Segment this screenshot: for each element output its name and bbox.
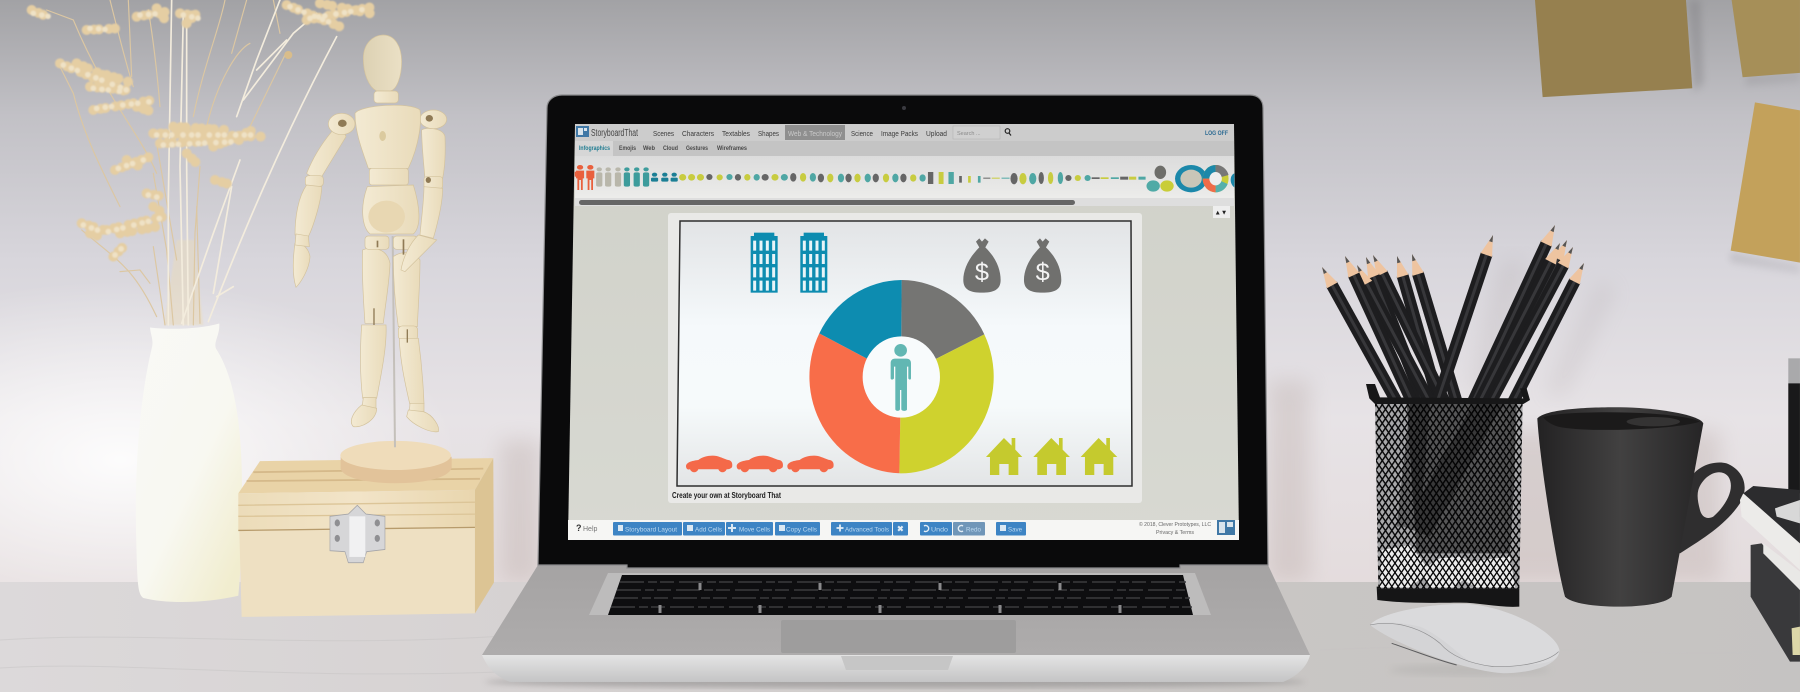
support rod — [393, 236, 395, 447]
dried flowers — [32, 0, 373, 325]
button: redo: Redo — [966, 526, 981, 534]
nav labels: Characters — [682, 129, 714, 138]
button: advanced tools — [831, 522, 892, 536]
nav labels: Shapes — [758, 129, 779, 138]
three circles chart icon — [1146, 166, 1174, 192]
mesh cup — [1366, 384, 1530, 607]
building one — [751, 233, 778, 293]
houses — [986, 438, 1117, 475]
copyright: Privacy & Terms — [1156, 530, 1194, 536]
touchpad — [781, 620, 1016, 653]
donut hole — [863, 336, 940, 418]
pencil holder and pencils — [1317, 222, 1615, 607]
pencil shadow — [1470, 260, 1615, 395]
box top — [238, 458, 493, 493]
silver latch — [330, 505, 385, 563]
mannequin stand — [340, 441, 452, 483]
mouse shadow — [1390, 664, 1550, 676]
notebooks and spool — [1740, 358, 1800, 662]
nav highlight — [785, 125, 845, 140]
logo — [576, 126, 589, 137]
sticky notes — [1535, 0, 1800, 271]
nav labels: Web & Technology — [788, 129, 842, 138]
mouse underside line — [1392, 643, 1457, 665]
money bag two — [1024, 238, 1061, 293]
category tabs: Wireframes — [717, 145, 747, 152]
button: undo: Undo — [931, 526, 948, 534]
mug handle — [1670, 462, 1745, 553]
category tabs — [579, 145, 747, 152]
help link: Help — [583, 526, 598, 533]
button: copy cells: Copy Cells — [786, 526, 818, 534]
nav labels: Upload — [926, 129, 947, 138]
clip on book — [1775, 500, 1800, 523]
grey people — [596, 167, 621, 187]
button: save — [996, 522, 1026, 536]
mannequin body — [293, 35, 447, 432]
laptop lid bezel — [538, 95, 1268, 568]
donut chart icon — [1203, 165, 1229, 192]
storyboard card — [668, 213, 1142, 503]
button: storyboard layout — [613, 522, 682, 536]
neck — [374, 91, 398, 103]
wall shadow behind laptop and mug — [500, 380, 1720, 582]
donut chart — [809, 280, 994, 473]
sticky note one — [1535, 0, 1692, 97]
mannequin details — [338, 115, 433, 343]
box lid seam — [238, 527, 475, 530]
storyboard cell — [677, 221, 1132, 486]
category tabs: Web — [643, 145, 655, 152]
nav labels: Textables — [722, 129, 750, 138]
cup base — [1377, 587, 1519, 607]
library icons — [575, 165, 1234, 192]
pale stems — [168, 0, 337, 325]
top navigation bar — [575, 124, 1234, 156]
black mug — [1537, 407, 1745, 607]
partial icon at strip edge — [1231, 173, 1234, 187]
ring chart icon — [1175, 165, 1207, 192]
box top grain — [247, 469, 483, 481]
sticky note shadows — [1688, 0, 1800, 271]
lower book pages — [1763, 543, 1800, 590]
flower bud — [284, 51, 292, 59]
teal people — [624, 167, 649, 187]
book spine label — [1792, 627, 1800, 655]
help link: ? — [576, 523, 582, 533]
car two — [737, 456, 783, 472]
search box — [953, 126, 1000, 139]
canvas arrows: ▲▼ — [1214, 210, 1227, 216]
icon library strip — [575, 156, 1234, 206]
mug body — [1537, 407, 1703, 607]
brand name: StoryboardThat — [591, 128, 638, 139]
car one — [686, 456, 732, 472]
mesh wall — [1375, 403, 1523, 588]
pelvis — [363, 185, 419, 234]
button: undo — [920, 522, 952, 536]
help link — [576, 523, 598, 533]
lower book — [1751, 543, 1800, 662]
building two — [800, 233, 827, 293]
front notch — [841, 656, 953, 670]
yellow small icons — [679, 172, 1136, 184]
wooden box — [238, 441, 494, 617]
soft light on wall — [0, 280, 460, 640]
nav labels — [653, 129, 947, 138]
camera — [902, 106, 906, 110]
cell infographic — [686, 233, 1117, 475]
button: close: ✖ — [897, 524, 904, 534]
button: save: Save — [1008, 526, 1022, 534]
bright reflections in mesh — [1380, 545, 1515, 587]
laptop base shadow — [485, 676, 1305, 688]
spool — [1788, 358, 1800, 493]
mouse shell — [1370, 604, 1559, 673]
category tabs: Gestures — [686, 145, 708, 152]
copyright — [1139, 521, 1211, 536]
flower clusters — [32, 3, 373, 257]
magic mouse — [1370, 604, 1559, 676]
nav labels: Science — [851, 129, 873, 138]
mug inner highlight — [1627, 417, 1680, 426]
search icon — [1005, 129, 1011, 136]
search box: Search ... — [957, 131, 981, 137]
log off: LOG OFF — [1205, 130, 1228, 137]
tan stems — [47, 0, 285, 325]
category tabs: Cloud — [663, 145, 678, 152]
pencils seen through mesh — [1397, 403, 1503, 537]
orange people — [575, 165, 594, 190]
button: add cells: Add Cells — [695, 526, 723, 534]
mouse seam — [1370, 623, 1559, 667]
person icon — [891, 344, 911, 411]
footer logo — [1217, 520, 1235, 535]
wooden mannequin — [293, 35, 447, 447]
keyboard well — [589, 573, 1211, 615]
upper book pages — [1740, 493, 1800, 570]
vase — [136, 323, 242, 602]
car three — [787, 456, 834, 472]
copyright: © 2018, Clever Prototypes, LLC — [1139, 521, 1211, 528]
house two — [1033, 438, 1070, 475]
canvas arrows — [1213, 206, 1230, 218]
caption: Create your own at Storyboard That — [672, 490, 781, 500]
library scrollbar — [575, 198, 1234, 206]
box lid front — [238, 490, 475, 530]
sticky note two — [1732, 0, 1800, 77]
screen — [568, 124, 1239, 540]
dark mesh shading — [1407, 403, 1517, 553]
teal small icons — [726, 172, 1146, 184]
desk surface — [0, 582, 1800, 692]
active tab — [575, 141, 613, 156]
button: move cells: Move Cells — [739, 526, 771, 534]
segment: grey — [901, 280, 984, 377]
money bag two: $ — [1036, 259, 1050, 287]
building icons — [751, 233, 827, 293]
grey small icons — [706, 172, 1128, 184]
mug inside — [1543, 412, 1700, 430]
button: copy cells — [775, 522, 820, 536]
segment: orange — [809, 333, 901, 473]
cars — [686, 456, 834, 472]
mouse top surface — [1370, 604, 1559, 666]
teal busts — [651, 173, 678, 182]
keyboard — [608, 575, 1193, 615]
button: storyboard layout: Storyboard Layout — [625, 526, 677, 534]
upper book cover — [1743, 486, 1800, 543]
head — [363, 35, 402, 91]
nav labels: Scenes — [653, 129, 674, 138]
stem bundle — [164, 240, 203, 325]
right arm — [420, 110, 447, 238]
right hand — [401, 235, 437, 272]
pencils — [1317, 222, 1589, 460]
segment: blue — [819, 280, 902, 377]
house three — [1081, 438, 1117, 475]
sticky note three — [1731, 102, 1800, 263]
segment: yellow — [899, 334, 994, 473]
laptop base deck — [482, 565, 1310, 655]
box base front — [239, 527, 475, 617]
money bag one — [963, 238, 1001, 293]
lid grain — [238, 502, 475, 516]
laptop — [482, 95, 1310, 688]
box right side — [475, 458, 494, 613]
legs — [351, 236, 439, 432]
cup rim — [1366, 384, 1530, 404]
category tabs: Emojis — [619, 145, 636, 152]
button: close — [893, 522, 908, 536]
waist — [369, 168, 408, 185]
button: advanced tools: Advanced Tools — [845, 526, 890, 534]
money bag one: $ — [975, 259, 989, 287]
button: move cells — [726, 522, 773, 536]
left arm — [293, 113, 355, 287]
torso — [355, 105, 421, 168]
button: redo — [953, 522, 985, 536]
button: add cells — [683, 522, 725, 536]
category tabs: Infographics — [579, 145, 610, 152]
laptop front edge — [482, 655, 1310, 682]
house one — [986, 438, 1022, 475]
screen canvas — [568, 124, 1239, 540]
bottom toolbar — [568, 520, 1239, 540]
nav labels: Image Packs — [881, 129, 918, 138]
